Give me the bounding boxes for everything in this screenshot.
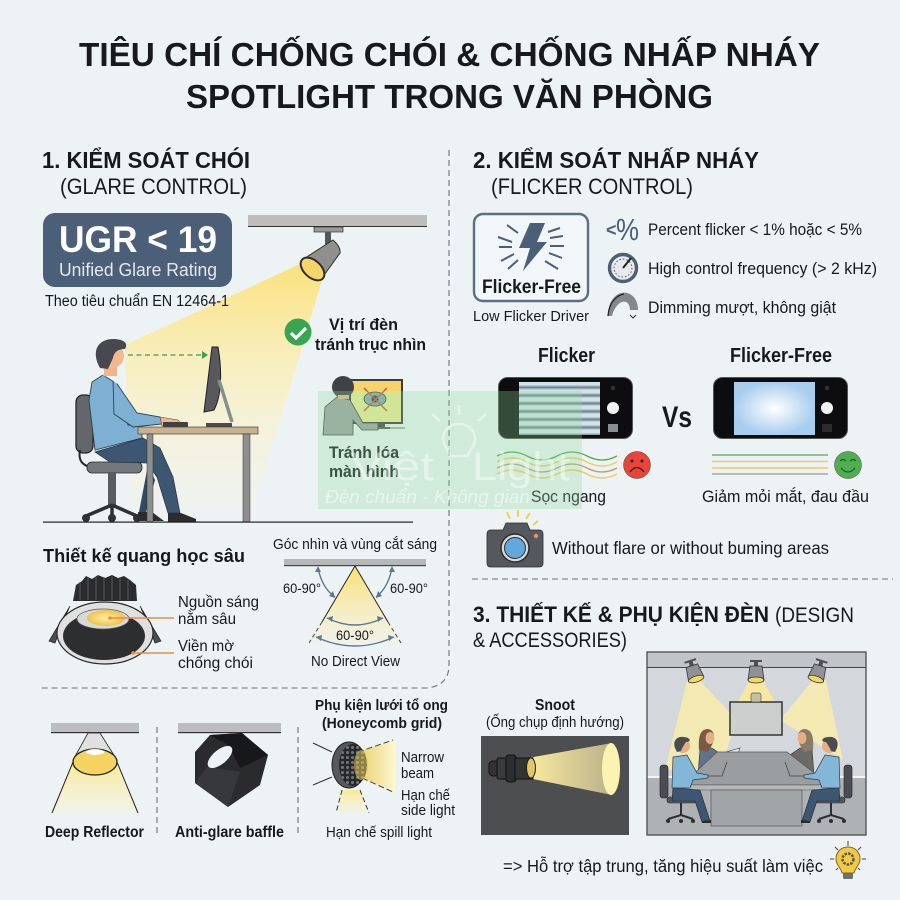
- title: TIÊU CHÍ CHỐNG CHÓI & CHỐNG NHẤP NHÁY: [79, 35, 820, 74]
- accessory: honeycomb grid: beam: [401, 766, 434, 782]
- heading: flicker control: (FLICKER CONTROL): [491, 174, 693, 199]
- accessory: deep reflector: [45, 723, 144, 841]
- heading: design and accessories: & ACCESSORIES): [473, 629, 627, 652]
- icon: flicker-free badge: Flicker-Free: [482, 277, 581, 298]
- labels: downlight parts: Nguồn sáng: [178, 594, 259, 611]
- diagram: cut-off angle: 60-90°: [283, 580, 321, 596]
- icon: track spotlight: [248, 215, 427, 285]
- text: percent flicker: Percent flicker < 1% hoặc < 5%: [648, 221, 862, 239]
- illustration: office worker at desk: [43, 339, 413, 523]
- icon: gauge: [610, 254, 636, 282]
- accessory: deep reflector: Deep Reflector: [45, 824, 144, 841]
- panel: glare control: [42, 146, 455, 841]
- text: dimming: Dimming mượt, không giật: [648, 299, 836, 317]
- comparison: flicker-free: [702, 345, 869, 506]
- comparison: flicker-free: Flicker-Free: [730, 345, 832, 367]
- badge: UGR below 19: Unified Glare Rating: [59, 259, 217, 280]
- comparison: flicker: Sọc ngang: [531, 487, 606, 506]
- conclusion text: => Hỗ trợ tập trung, tăng hiệu suất làm việc: [503, 855, 823, 876]
- heading: deep optics: Thiết kế quang học sâu: [43, 545, 245, 566]
- heading: flicker control: [473, 146, 759, 199]
- heading: flicker control: 2. KIỂM SOÁT NHẤP NHÁY: [473, 146, 759, 173]
- accessory: snoot: [481, 697, 629, 835]
- labels: downlight parts: Viền mờ: [178, 638, 234, 655]
- accessory: honeycomb grid: [313, 697, 455, 841]
- comparison: flicker: Flicker: [538, 345, 595, 367]
- watermark: Đèn chuẩn - Không gian: [325, 487, 530, 507]
- label: avoid screen glare: Tránh lóa: [329, 443, 399, 462]
- labels: downlight parts: nằm sâu: [178, 609, 236, 628]
- icon: percent: [606, 212, 639, 247]
- icon: camera: [487, 510, 543, 567]
- illustration: avoid screen glare: [323, 376, 405, 435]
- accessory: snoot: (Ống chụp định hướng): [486, 713, 624, 731]
- accessory: honeycomb grid: side light: [401, 803, 455, 819]
- heading: design and accessories: [473, 602, 854, 652]
- diagram: cut-off angle: Góc nhìn và vùng cắt sáng: [273, 536, 437, 553]
- diagram: cut-off angle: 60-90°: [390, 580, 428, 596]
- watermark: [318, 391, 582, 509]
- badge: UGR below 19: UGR < 19: [59, 219, 217, 260]
- panel: flicker control: [473, 146, 877, 567]
- badge: UGR below 19: [43, 213, 232, 287]
- accessory: anti-glare baffle: Anti-glare baffle: [175, 824, 284, 841]
- icon: percent: %: [616, 212, 639, 247]
- accessory: honeycomb grid: Hạn chế spill light: [326, 825, 432, 841]
- icon: idea bulb: [830, 841, 866, 879]
- label: lamp position: tránh trục nhìn: [315, 335, 426, 354]
- accessory: honeycomb grid: Hạn chế: [401, 788, 450, 804]
- labels: downlight parts: chống chói: [178, 655, 253, 672]
- accessory: honeycomb grid: (Honeycomb grid): [322, 715, 442, 732]
- label: avoid screen glare: màn hình: [329, 462, 399, 481]
- accessory: snoot: Snoot: [535, 697, 576, 714]
- diagram: cut-off angle: [273, 536, 437, 670]
- label: lamp position: Vị trí đèn: [329, 315, 398, 334]
- heading: design and accessories: (DESIGN: [775, 604, 854, 627]
- heading: design and accessories: 3. THIẾT KẾ & PHỤ KIỆN ĐÈN: [473, 602, 769, 627]
- icon: recessed downlight: [49, 575, 174, 664]
- panel: design and accessories: [473, 602, 866, 879]
- label: versus: Vs: [662, 401, 692, 434]
- heading: glare control: (GLARE CONTROL): [60, 174, 247, 199]
- illustration: meeting room: [647, 652, 866, 835]
- diagram: cut-off angle: No Direct View: [311, 654, 400, 670]
- label: avoid screen glare: [329, 443, 399, 481]
- accessory: anti-glare baffle: [175, 723, 284, 841]
- light beam over desk: [125, 264, 322, 522]
- label: lamp position: [315, 315, 426, 354]
- diagram: cut-off angle: 60-90°: [336, 627, 374, 643]
- comparison: flicker-free: Giảm mỏi mắt, đau đầu: [702, 487, 869, 506]
- icon: green check: [284, 318, 312, 346]
- icon: percent: <: [606, 220, 617, 240]
- labels: downlight parts: [178, 594, 259, 672]
- title: SPOTLIGHT TRONG VĂN PHÒNG: [186, 78, 713, 116]
- accessory: honeycomb grid: Phụ kiện lưới tổ ong: [315, 697, 448, 714]
- icon: flicker-free badge: [474, 214, 588, 301]
- title: [79, 35, 820, 116]
- watermark: Light: [472, 445, 570, 489]
- watermark: Việt: [350, 445, 434, 489]
- caption: driver: Low Flicker Driver: [473, 308, 589, 325]
- standard note: Theo tiêu chuẩn EN 12464-1: [45, 293, 229, 310]
- icon: dimming arc: [608, 293, 638, 318]
- text: camera note: Without flare or without buming areas: [552, 538, 829, 558]
- comparison: flicker: [497, 345, 650, 506]
- heading: glare control: [42, 146, 250, 199]
- heading: glare control: 1. KIỂM SOÁT CHÓI: [42, 146, 250, 173]
- accessory: honeycomb grid: Narrow: [401, 750, 444, 766]
- text: control frequency: High control frequency (> 2 kHz): [648, 260, 877, 278]
